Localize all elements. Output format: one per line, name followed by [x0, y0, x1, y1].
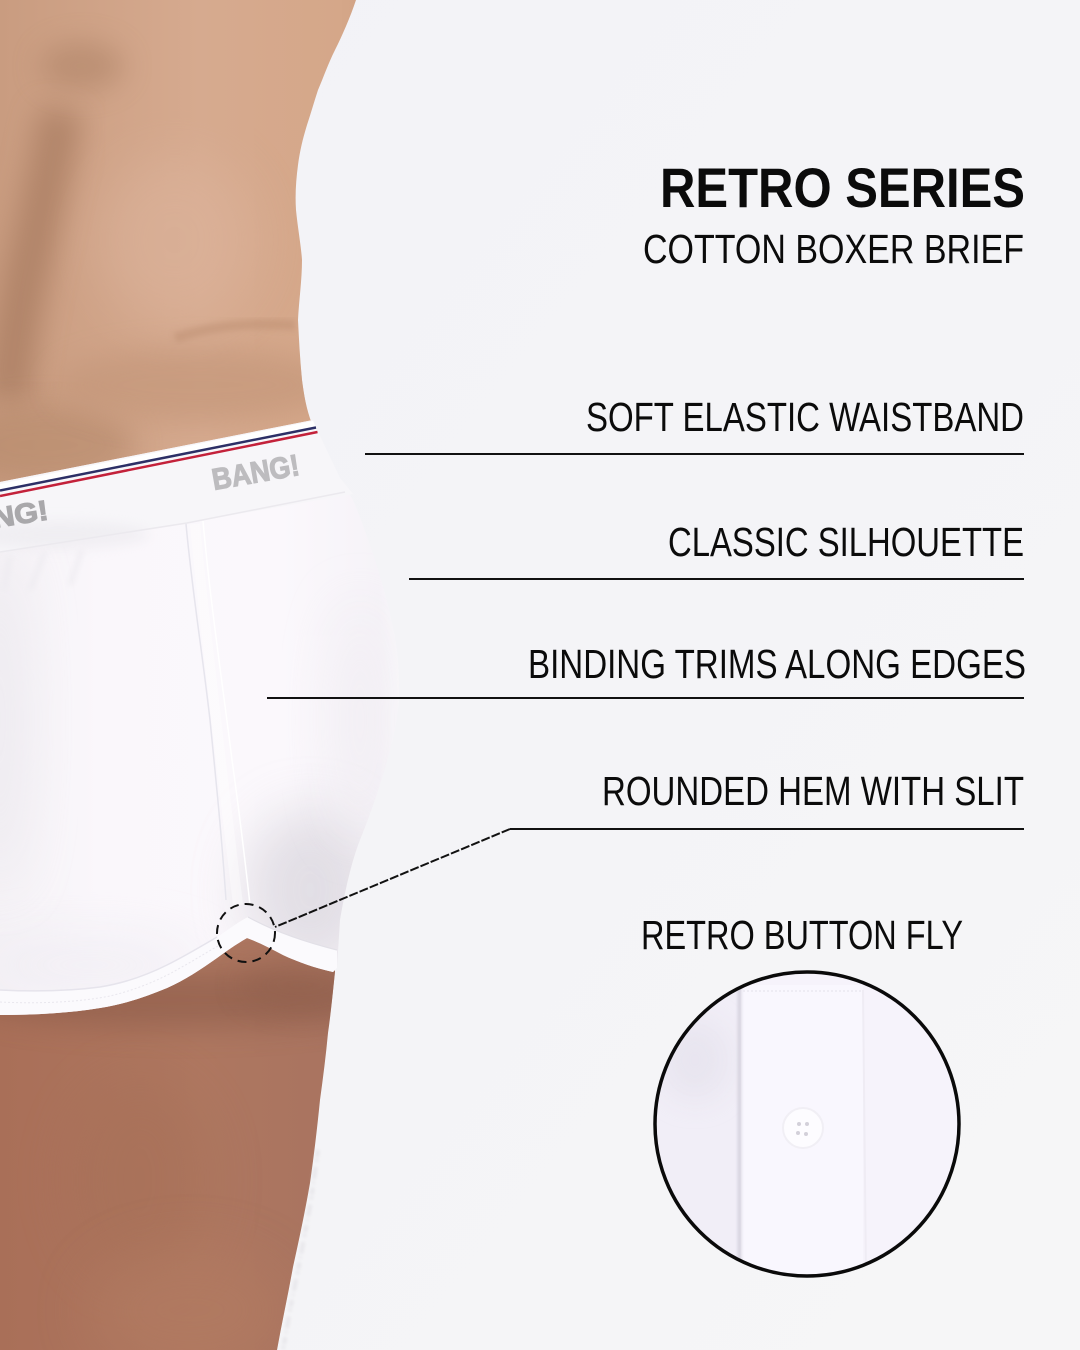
gathers under waistband [4, 550, 82, 590]
photo: white boxer brief [0, 420, 399, 1015]
photo: model torso [0, 0, 356, 482]
waistband [0, 420, 353, 590]
fabric shading [0, 550, 386, 991]
waistband logo: right: BANG! [209, 449, 302, 497]
title: RETRO SERIES [660, 156, 1025, 219]
photo: model thigh [0, 938, 335, 1350]
button [783, 1108, 823, 1148]
hem binding [0, 917, 337, 1015]
inset: button fly detail [650, 970, 959, 1280]
side seam [186, 521, 250, 905]
callout: dashed leader to hem slit [217, 829, 510, 962]
feature label: retro button fly: RETRO BUTTON FLY [641, 912, 963, 958]
